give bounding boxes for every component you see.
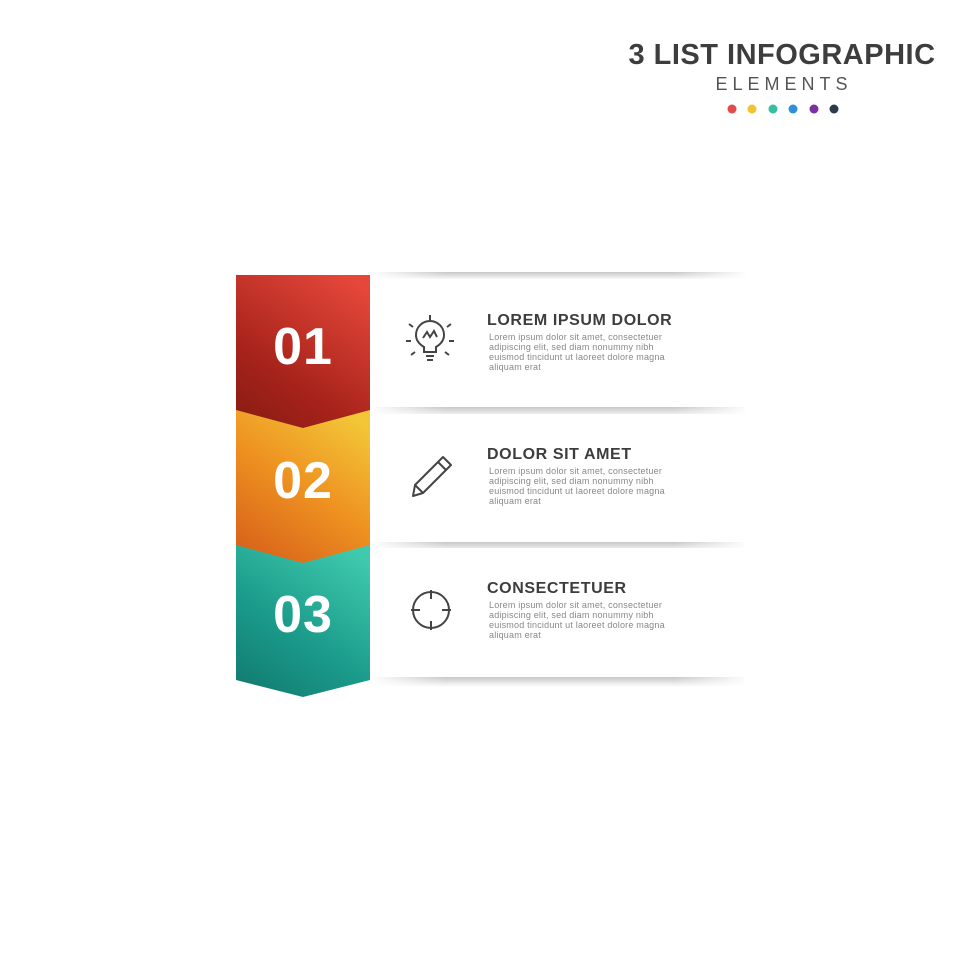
text 3 [487,580,665,640]
text 3: Lorem ipsum dolor sit amet, consectetuer [489,600,662,610]
text 1 [487,312,672,372]
icon: target [411,590,451,630]
tab 03: 03 [273,586,333,644]
text 3: euismod tincidunt ut laoreet dolore magna [489,620,665,630]
panel 2 [236,410,745,563]
tab 03 [236,545,370,697]
text 1: aliquam erat [489,362,541,372]
text 2: euismod tincidunt ut laoreet dolore magna [489,486,665,496]
icon: pencil [413,457,451,496]
tab 01 [236,275,370,428]
text 2: DOLOR SIT AMET [487,446,632,463]
tab 01: 01 [273,318,333,376]
text 2: aliquam erat [489,496,541,506]
text 2 [487,446,665,506]
text 3: CONSECTETUER [487,580,627,597]
tab 02 [236,410,370,563]
title: ELEMENTS [715,74,853,94]
shadows [370,270,750,690]
text 3: adipiscing elit, sed diam nonummy nibh [489,610,654,620]
text 2: adipiscing elit, sed diam nonummy nibh [489,476,654,486]
text 2: Lorem ipsum dolor sit amet, consectetuer [489,466,662,476]
text 1: LOREM IPSUM DOLOR [487,312,672,329]
text 1: adipiscing elit, sed diam nonummy nibh [489,342,654,352]
text 1: Lorem ipsum dolor sit amet, consectetuer [489,332,662,342]
title: 3 LIST INFOGRAPHIC [628,39,936,71]
title [628,39,936,114]
text 1: euismod tincidunt ut laoreet dolore magna [489,352,665,362]
text 3: aliquam erat [489,630,541,640]
icon: light bulb [406,315,454,360]
tab 02: 02 [273,452,333,510]
panel 3 [236,545,745,697]
panel 1 [236,275,745,428]
